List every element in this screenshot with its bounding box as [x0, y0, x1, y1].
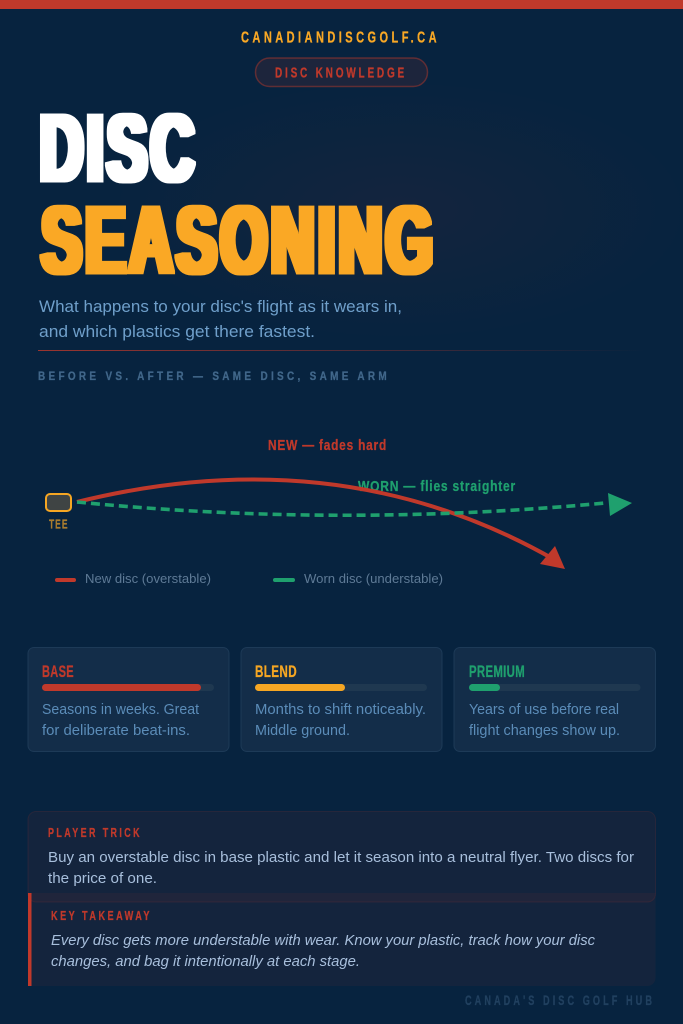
- legend: New disc (overstable): [85, 571, 211, 586]
- panel: blend plastic: Middle ground.: [255, 723, 350, 739]
- worn disc path: [77, 493, 632, 516]
- badge: disc knowledge: DISC KNOWLEDGE: [275, 66, 407, 82]
- panel: premium plastic: PREMIUM: [469, 663, 525, 681]
- panel: base plastic: Seasons in weeks. Great: [42, 702, 199, 718]
- panel: player trick: the price of one.: [48, 870, 157, 887]
- title: SEASONING: [42, 187, 436, 294]
- label: new disc: NEW — fades hard: [268, 437, 387, 454]
- legend: Worn disc (understable): [304, 571, 443, 586]
- subtitle: What happens to your disc's flight as it wears in,: [39, 297, 402, 316]
- panel: premium plastic: Years of use before real: [469, 702, 619, 718]
- panel: player trick: [28, 812, 656, 902]
- title: [40, 95, 436, 294]
- subtitle: and which plastics get there fastest.: [39, 322, 315, 341]
- panel: base plastic: for deliberate beat-ins.: [42, 723, 190, 739]
- panel: player trick: PLAYER TRICK: [48, 825, 142, 840]
- tee pad: [46, 494, 71, 532]
- label: worn disc: WORN — flies straighter: [358, 478, 516, 495]
- panel: key takeaway: Every disc gets more understable with wear. Know your plastic, track how your disc: [51, 932, 595, 949]
- new disc path: [77, 480, 565, 569]
- panel: premium plastic: [454, 648, 656, 752]
- panel: blend plastic: [241, 648, 442, 752]
- panel: blend plastic: BLEND: [255, 663, 297, 681]
- panel: base plastic: [28, 648, 229, 752]
- title: DISC: [40, 95, 198, 202]
- site name: CANADIANDISCGOLF.CA: [241, 30, 440, 46]
- legend: [55, 571, 443, 586]
- tee pad: TEE: [49, 518, 68, 532]
- panel: key takeaway: KEY TAKEAWAY: [51, 908, 152, 923]
- panel: player trick: Buy an overstable disc in base plastic and let it season into a neutral flyer. Two discs for: [48, 849, 634, 866]
- panel: key takeaway: changes, and bag it intentionally at each stage.: [51, 953, 360, 970]
- panel: blend plastic: Months to shift noticeably.: [255, 702, 426, 718]
- top accent bar: [0, 0, 683, 9]
- subtitle: [39, 297, 402, 341]
- panel: base plastic: BASE: [42, 663, 74, 681]
- panel: key takeaway: [28, 893, 656, 986]
- badge: disc knowledge: [256, 58, 428, 86]
- panel: premium plastic: flight changes show up.: [469, 723, 620, 739]
- section label: BEFORE VS. AFTER — SAME DISC, SAME ARM: [38, 369, 390, 383]
- flight path chart: [46, 437, 632, 586]
